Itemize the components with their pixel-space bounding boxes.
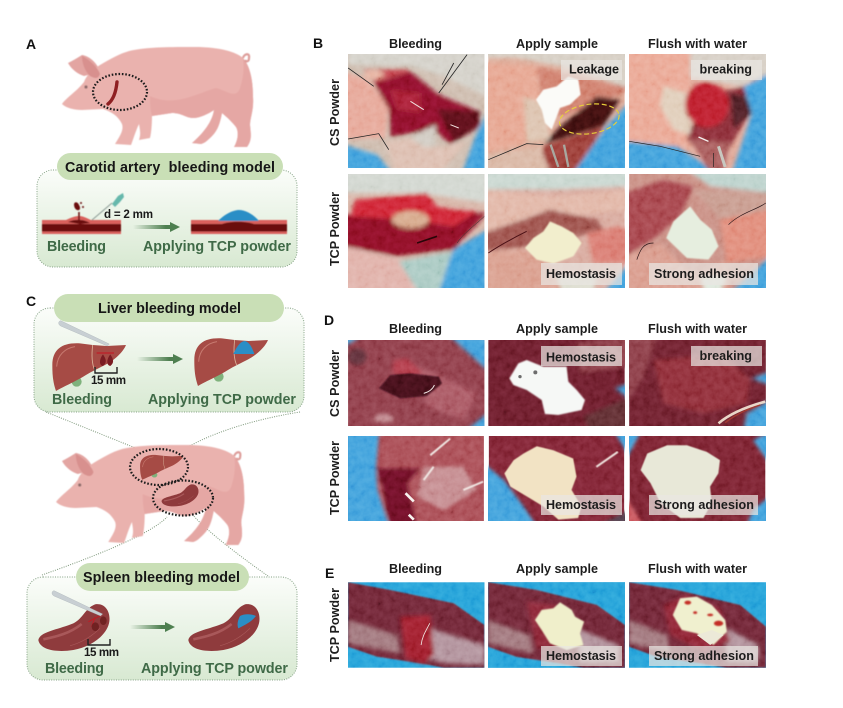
spleen title pill — [76, 563, 249, 591]
photo E1 — [348, 582, 484, 668]
panel A: carotid artery model — [26, 36, 297, 267]
arrow — [133, 222, 180, 232]
overlay breaking: breaking — [700, 349, 752, 363]
photo B5 — [488, 174, 625, 288]
scale bar 15 mm: 15 mm — [91, 374, 126, 387]
overlay Hemostasis: Hemostasis — [546, 267, 616, 281]
overlay Strong adhesion: Strong adhesion — [654, 649, 754, 663]
column headers: Apply sample — [516, 562, 598, 576]
panel B: carotid photos — [313, 35, 770, 293]
photo B4 — [348, 174, 484, 288]
photo D2 — [488, 340, 625, 426]
leader lines liver — [42, 412, 300, 576]
overlay Strong adhesion: Strong adhesion — [654, 267, 754, 281]
pig illustration C — [56, 445, 244, 545]
vessel with TCP powder — [191, 210, 287, 234]
photo D3 — [629, 340, 766, 426]
caption applying: Applying TCP powder — [148, 392, 296, 408]
label E: E — [325, 565, 334, 581]
scale bar 15 mm: 15 mm — [84, 646, 119, 659]
vessel bleeding with needle — [42, 193, 124, 234]
photo B2 — [488, 54, 625, 168]
panel E: spleen photos — [325, 562, 766, 668]
overlay Hemostasis: Hemostasis — [546, 350, 616, 364]
column headers — [389, 562, 747, 576]
photo D5 — [488, 436, 625, 521]
overlay Hemostasis — [541, 263, 622, 285]
overlay Hemostasis — [541, 346, 622, 366]
overlay Strong adhesion — [649, 263, 758, 285]
photo B6 — [629, 174, 766, 288]
label C: C — [26, 293, 36, 309]
overlay Strong adhesion: Strong adhesion — [654, 498, 754, 512]
overlay Leakage: Leakage — [569, 62, 619, 76]
photo E2 — [488, 582, 625, 668]
liver icon bleeding — [52, 321, 126, 391]
overlay breaking: breaking — [700, 62, 752, 76]
photo D6 — [629, 436, 766, 521]
column headers: Bleeding — [389, 562, 442, 576]
arrow — [137, 354, 183, 364]
liver model box — [34, 308, 304, 412]
overlay breaking — [691, 60, 762, 80]
overlay Hemostasis — [541, 646, 622, 666]
row label TCP Powder: TCP Powder — [328, 192, 342, 266]
photo B1 — [348, 54, 484, 168]
spleen icon bleeding — [38, 591, 110, 651]
caption bleeding: Bleeding — [47, 239, 106, 255]
overlay Strong adhesion — [649, 495, 758, 515]
overlay Strong adhesion — [649, 646, 758, 666]
row label CS Powder: CS Powder — [328, 79, 342, 146]
row label TCP Powder: TCP Powder — [328, 441, 342, 515]
column headers: Bleeding — [389, 322, 442, 336]
pig illustration A — [62, 47, 253, 147]
column headers: Flush with water — [648, 37, 747, 51]
spleen model box — [27, 577, 297, 680]
caption applying: Applying TCP powder — [141, 661, 288, 677]
row label CS Powder: CS Powder — [328, 350, 342, 417]
carotid model box — [37, 170, 297, 267]
carotid title pill: Carotid artery bleeding model — [65, 160, 275, 176]
spleen title pill: Spleen bleeding model — [83, 570, 240, 586]
overlay breaking — [691, 346, 762, 366]
column headers: Flush with water — [648, 562, 747, 576]
photo B3 — [629, 54, 766, 168]
column headers — [389, 322, 747, 336]
column headers — [389, 37, 747, 51]
label A: A — [26, 36, 36, 52]
row label TCP Powder: TCP Powder — [328, 588, 342, 662]
label B: B — [313, 35, 323, 51]
panel D: liver photos — [324, 312, 770, 526]
caption bleeding: Bleeding — [45, 661, 104, 677]
caption bleeding: Bleeding — [52, 392, 112, 408]
column headers: Apply sample — [516, 322, 598, 336]
photo E3 — [629, 582, 766, 668]
overlay Hemostasis: Hemostasis — [546, 649, 616, 663]
panel C: liver and spleen models — [26, 293, 304, 680]
liver icon with powder — [194, 338, 268, 386]
overlay Leakage — [561, 60, 622, 80]
scale bar 15 mm — [91, 367, 126, 387]
carotid title pill — [57, 153, 283, 180]
column headers: Apply sample — [516, 37, 598, 51]
d = 2 mm: d = 2 mm — [104, 208, 153, 221]
scale bar 15 mm — [84, 639, 119, 659]
label D: D — [324, 312, 334, 328]
arrow — [130, 622, 175, 632]
overlay Hemostasis — [541, 495, 622, 515]
overlay Hemostasis: Hemostasis — [546, 498, 616, 512]
photo D4 — [348, 436, 484, 521]
liver title pill — [54, 294, 284, 322]
column headers: Bleeding — [389, 37, 442, 51]
caption applying: Applying TCP powder — [143, 239, 291, 255]
column headers: Flush with water — [648, 322, 747, 336]
spleen icon with powder — [188, 604, 260, 651]
liver title pill: Liver bleeding model — [98, 301, 241, 317]
photo D1 — [348, 340, 484, 426]
